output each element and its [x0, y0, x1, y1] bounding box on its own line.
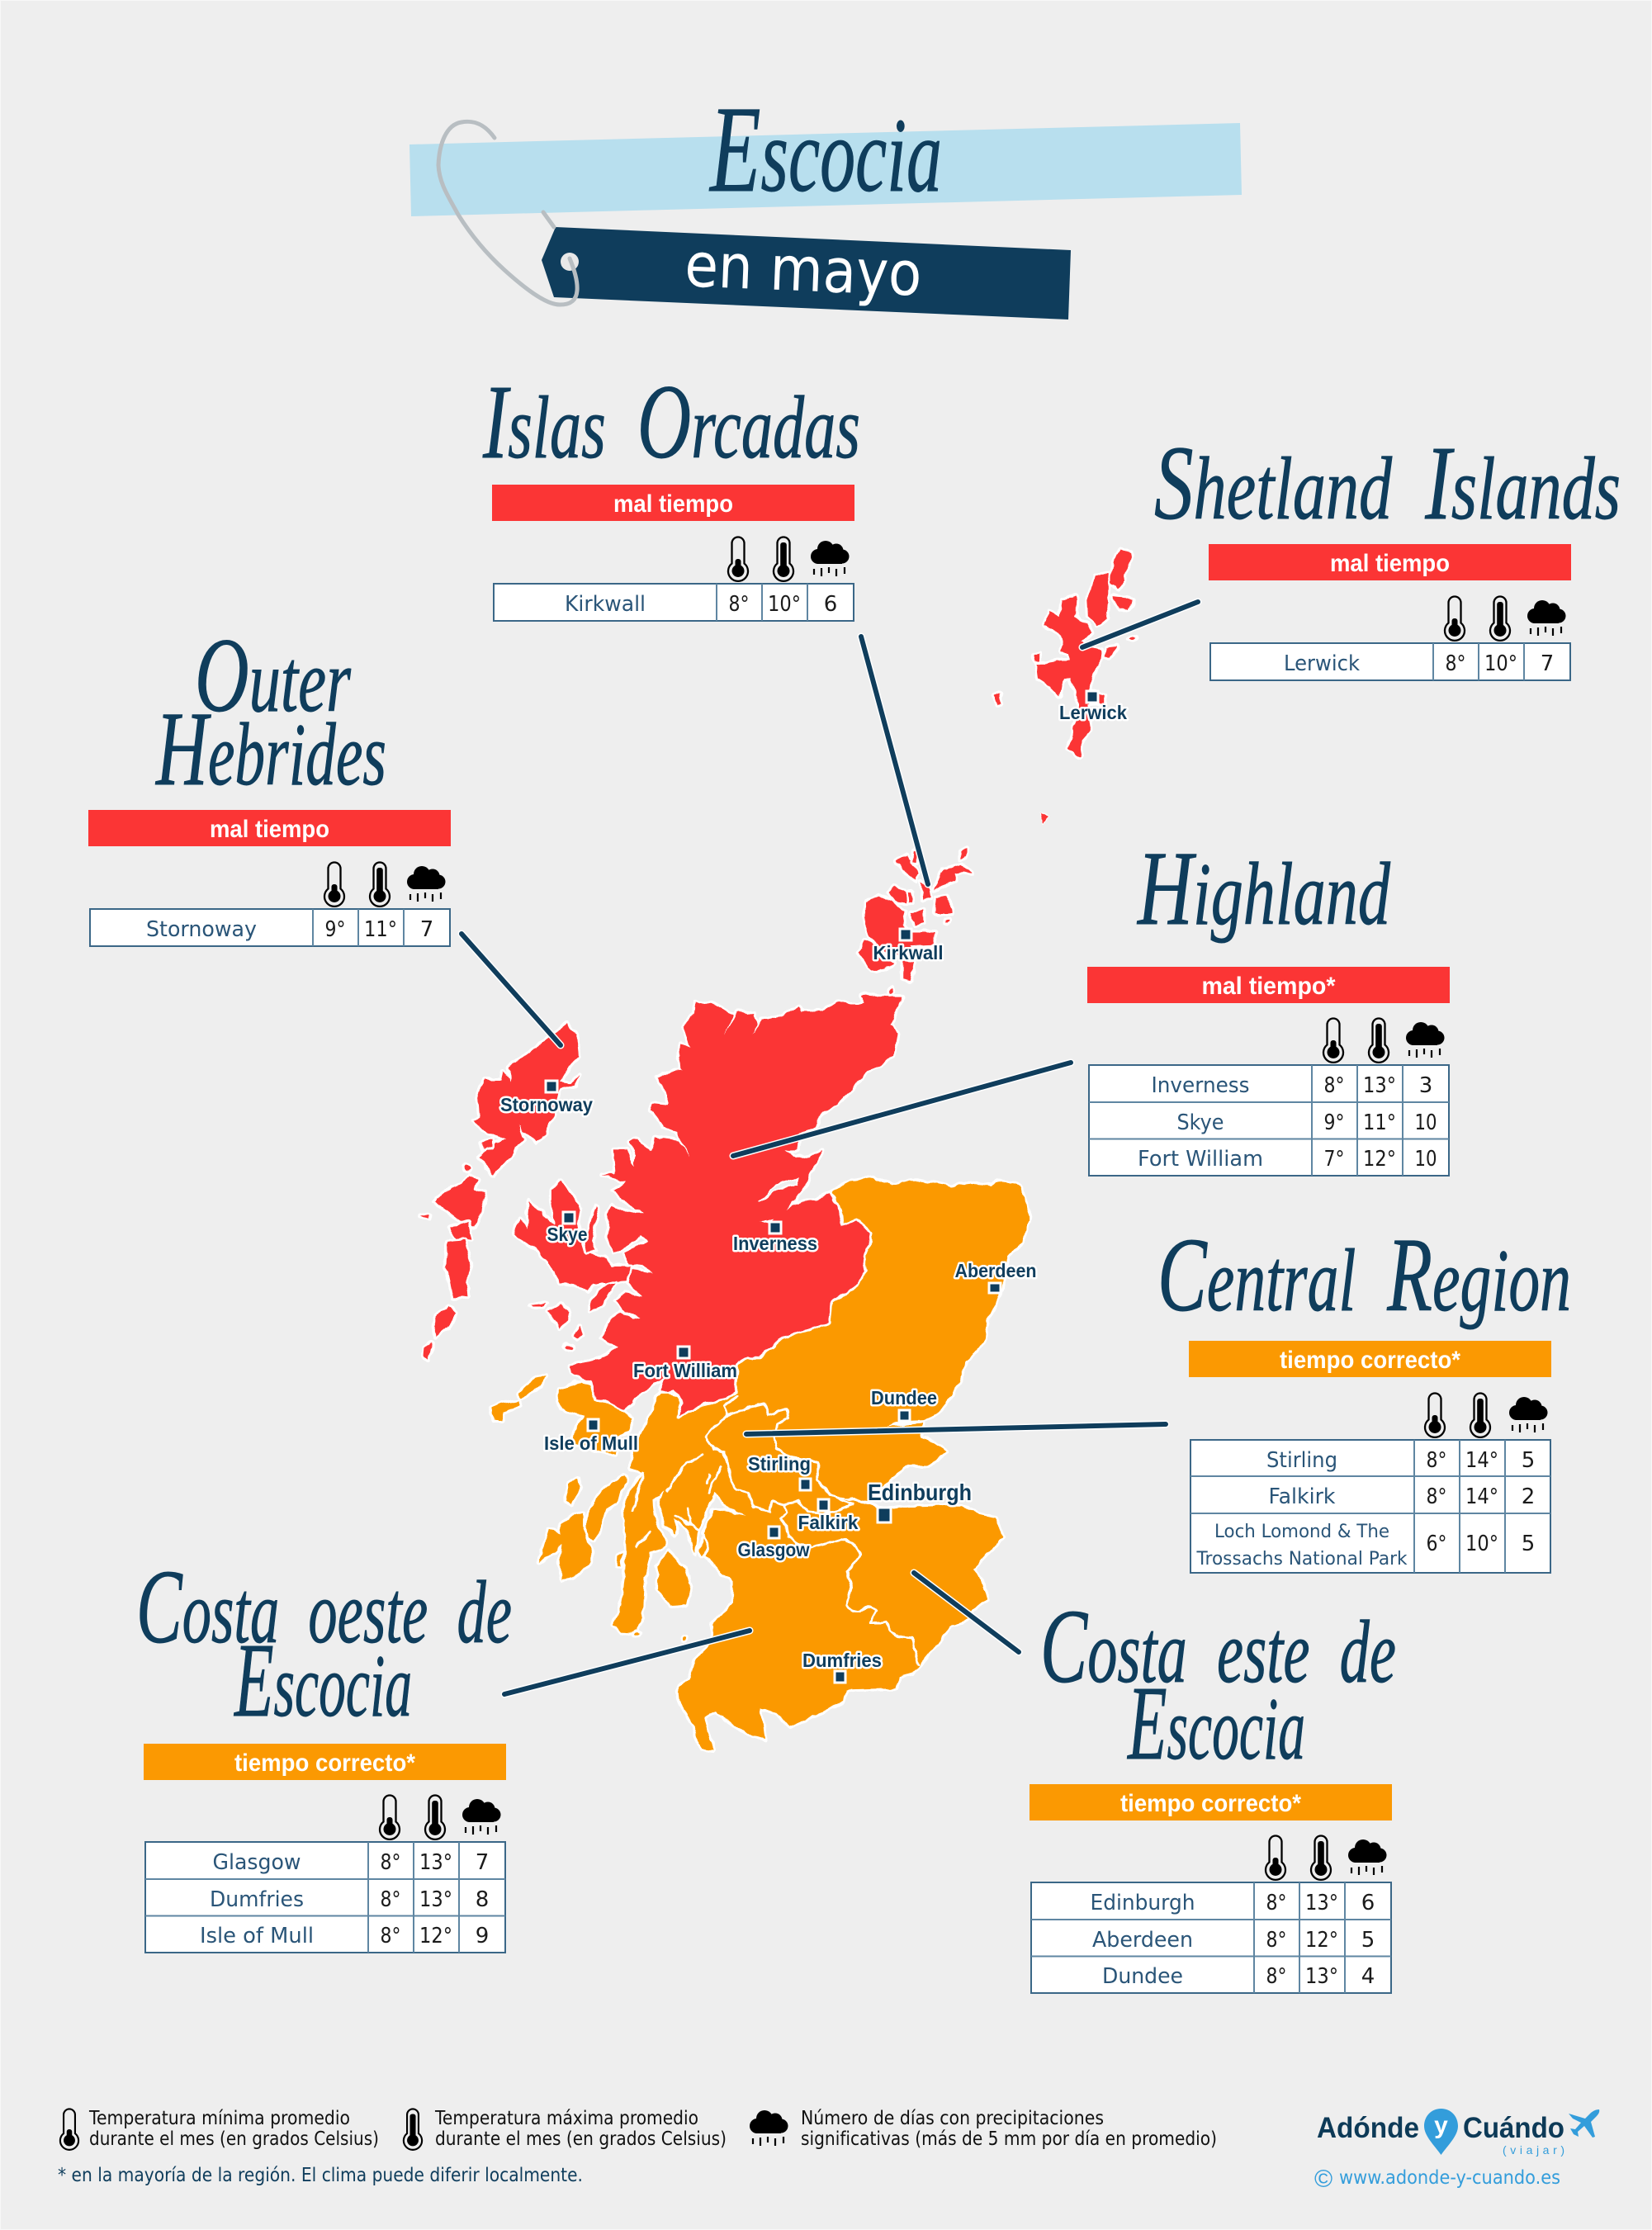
- table: Trossachs National Park: [1196, 1549, 1408, 1570]
- islet: Monach: [420, 1214, 429, 1219]
- logo: [1314, 2109, 1599, 2193]
- leader: West coast: [504, 1631, 750, 1694]
- icon: plane: [1569, 2109, 1599, 2138]
- table: 9: [476, 1924, 489, 1948]
- Shetland: Yell: [1087, 575, 1109, 626]
- city: Inverness: Inverness: [733, 1233, 817, 1254]
- Orkney: North Ronaldsay: [960, 848, 968, 859]
- table: 2: [1522, 1484, 1535, 1509]
- icons: [1425, 1394, 1547, 1437]
- legend item: rainy days: significativas (más de 5 mm por día en promedio): [801, 2128, 1217, 2150]
- island: Bute: [700, 1539, 708, 1555]
- city: Glasgow: [738, 1527, 810, 1560]
- table: 10: [1415, 1147, 1437, 1172]
- heading: Islas Orcadas: [482, 363, 860, 481]
- table: Skye: [1177, 1110, 1224, 1135]
- status bar: [492, 485, 854, 521]
- table: 11°: [364, 917, 397, 942]
- status bar: [1209, 544, 1571, 580]
- website: [1314, 2166, 1560, 2193]
- status bar: [1087, 967, 1450, 1003]
- legend item: minimum temperature: Temperatura mínima promedio: [88, 2108, 350, 2129]
- legend item: maximum temperature: durante el mes (en grados Celsius): [435, 2128, 727, 2150]
- island: Barra: [433, 1307, 457, 1336]
- table: 10: [1415, 1110, 1437, 1135]
- heading line 1: Costa este de: [1040, 1588, 1396, 1705]
- panel: Outer Hebrides: [88, 617, 451, 946]
- Shetland Mainland: [1036, 596, 1105, 757]
- table: 13°: [1363, 1073, 1396, 1098]
- table: Fort William: [1138, 1147, 1263, 1172]
- map of Scotland: [420, 549, 1135, 1750]
- city: Aberdeen: Aberdeen: [954, 1260, 1037, 1281]
- table: [90, 909, 450, 946]
- table: 9°: [1324, 1110, 1344, 1135]
- city: Isle of Mull: [544, 1419, 638, 1454]
- weather panel body: [1087, 967, 1450, 1176]
- table: 7: [1541, 651, 1554, 676]
- table: 5: [1361, 1928, 1375, 1953]
- table: 6: [1361, 1891, 1375, 1915]
- island: Coll: [519, 1374, 547, 1398]
- Orkney: Mainland: [866, 896, 935, 954]
- city: Dumfries: [802, 1650, 882, 1683]
- island: Colonsay: [566, 1479, 580, 1503]
- city: Edinburgh: Edinburgh: [868, 1480, 972, 1505]
- status bar: tiempo correcto*: [1120, 1790, 1301, 1817]
- city: Fort William: [633, 1347, 737, 1381]
- Shetland: Papa Stour: [1033, 655, 1040, 661]
- Shetland: Out Skerries: [1130, 637, 1135, 641]
- weather panel body: [492, 485, 854, 621]
- map: orange southern regions: [492, 1177, 1030, 1750]
- status bar: mal tiempo: [613, 490, 733, 518]
- table: 9°: [325, 917, 345, 942]
- Stroma: [888, 988, 892, 995]
- table: 8°: [1324, 1073, 1344, 1098]
- city: Kirkwall: Kirkwall: [873, 942, 943, 963]
- panel: Highland: [1087, 830, 1450, 1176]
- city: Skye: Skye: [547, 1224, 588, 1245]
- status bar: mal tiempo: [210, 816, 329, 843]
- table: 8°: [1266, 1964, 1286, 1989]
- city: Stirling: Stirling: [748, 1453, 811, 1475]
- Orkney: Shapinsay: [911, 910, 925, 926]
- icons: [380, 1795, 500, 1839]
- legend item: minimum temperature: [60, 2108, 379, 2150]
- status bar: [144, 1744, 506, 1780]
- table: 8°: [1266, 1928, 1286, 1953]
- table: 5: [1522, 1532, 1535, 1556]
- table: 8°: [380, 1924, 401, 1948]
- tag hole: [561, 253, 579, 271]
- islet: Sanda: [634, 1632, 640, 1635]
- table: 6°: [1427, 1532, 1446, 1556]
- table: 14°: [1465, 1484, 1498, 1509]
- table: Lerwick: [1284, 651, 1360, 676]
- city: Falkirk: Falkirk: [798, 1512, 859, 1533]
- city: Skye: [547, 1212, 588, 1245]
- brand word: Adónde: Adónde: [1317, 2112, 1419, 2144]
- island: Lewis and Harris: [474, 1023, 580, 1176]
- islet: Berneray: [463, 1166, 471, 1171]
- city markers and labels: [500, 691, 1127, 1683]
- leader: Central: [746, 1424, 1166, 1434]
- status bar: tiempo correcto*: [1280, 1347, 1460, 1374]
- panel: Central Region: [1157, 1216, 1571, 1573]
- city: Glasgow: Glasgow: [738, 1539, 810, 1560]
- tagline: ( v i a j a r ): [1503, 2143, 1564, 2157]
- icon: map pin with y: [1424, 2109, 1458, 2155]
- table: 8°: [728, 592, 750, 617]
- table: 4: [1361, 1964, 1375, 1989]
- map: Shetland islands: [994, 549, 1135, 757]
- heading: Central Region: [1157, 1216, 1571, 1333]
- leader lines: [462, 602, 1198, 1694]
- city: Fort William: Fort William: [633, 1360, 737, 1381]
- island: Eigg: [573, 1326, 583, 1340]
- legend item: rainy days: Número de días con precipitaciones: [801, 2108, 1104, 2129]
- island: Tiree: [492, 1400, 519, 1421]
- status bar: mal tiempo*: [1202, 973, 1336, 1000]
- icons: [324, 862, 446, 907]
- panel: Costa oeste de Escocia: [136, 1548, 512, 1953]
- island: Islay: [540, 1514, 591, 1579]
- weather panel body: [88, 810, 451, 946]
- table: 8°: [1445, 651, 1466, 676]
- icons: [1266, 1836, 1387, 1880]
- island: Arran: [658, 1552, 691, 1606]
- table: 13°: [419, 1850, 452, 1875]
- table: 8: [476, 1887, 489, 1912]
- Highland mainland: [571, 994, 901, 1415]
- tag string: [438, 121, 577, 305]
- table: 5: [1522, 1448, 1535, 1473]
- status bar: mal tiempo: [1330, 550, 1450, 577]
- island: Skye: [513, 1181, 630, 1292]
- website: ©: [1314, 2166, 1332, 2193]
- map: red northern regions: [420, 848, 971, 1415]
- table: 12°: [1305, 1928, 1338, 1953]
- heading line 2: Hebrides: [155, 690, 386, 807]
- table: 7°: [1324, 1147, 1344, 1172]
- Orkney: Eday: [921, 883, 930, 899]
- island: Raasay: [586, 1205, 597, 1253]
- panel: Shetland Islands: [1154, 424, 1621, 680]
- city: Inverness: [733, 1222, 817, 1254]
- island: North Uist: [435, 1176, 485, 1228]
- table: 13°: [419, 1887, 452, 1912]
- Shetland: Unst: [1110, 549, 1131, 589]
- weather panel body: [1209, 544, 1571, 680]
- leader: Highland: [733, 1063, 1071, 1156]
- region boundaries and inlets: [634, 1396, 917, 1664]
- Orkney: Egilsay: [908, 892, 913, 902]
- city: Dundee: Dundee: [871, 1387, 937, 1409]
- weather panel body: [1030, 1784, 1392, 1993]
- brand word: Cuándo: Cuándo: [1463, 2112, 1564, 2144]
- city: Edinburgh: [868, 1480, 972, 1522]
- table: Stornoway: [146, 917, 257, 942]
- city: Stornoway: Stornoway: [500, 1094, 593, 1115]
- table: [1210, 643, 1570, 680]
- website: www.adonde-y-cuando.es: [1339, 2167, 1560, 2189]
- table: [494, 584, 854, 621]
- table: [1031, 1882, 1391, 1993]
- city: Stornoway: [500, 1081, 593, 1115]
- table: Dumfries: [210, 1887, 304, 1912]
- weather panel body: [1189, 1341, 1551, 1573]
- table: 7: [420, 917, 433, 942]
- Orkney: Auskerry: [945, 919, 949, 922]
- table: 12°: [1363, 1147, 1396, 1172]
- city: Dundee: [871, 1387, 937, 1421]
- city: Falkirk: [798, 1499, 859, 1533]
- table: 8°: [380, 1850, 401, 1875]
- city: Lerwick: [1059, 691, 1127, 723]
- legend item: maximum temperature: Temperatura máxima promedio: [434, 2108, 698, 2129]
- heading line 2: Escocia: [1127, 1664, 1305, 1782]
- Orkney: South Ronaldsay: [903, 960, 915, 980]
- Orkney: Rousay: [890, 887, 908, 903]
- title banner: [409, 81, 1242, 320]
- islets near Harris: [482, 1139, 492, 1149]
- island: Benbecula: [450, 1222, 471, 1240]
- title ribbon: light blue band: [409, 123, 1242, 216]
- table: Kirkwall: [565, 592, 646, 617]
- island: Muck: [565, 1345, 572, 1348]
- panel: Costa este de Escocia: [1030, 1588, 1396, 1993]
- table: 3: [1419, 1073, 1432, 1098]
- table: 10°: [1484, 651, 1517, 676]
- table: 10°: [768, 592, 801, 617]
- table: [1190, 1440, 1550, 1573]
- island: Rum: [547, 1304, 570, 1327]
- leader: Shetland: [1082, 602, 1198, 647]
- Orkney: Hoy: [859, 940, 894, 971]
- heading line 1: Outer: [195, 617, 352, 734]
- status bar: tiempo correcto*: [234, 1749, 415, 1777]
- table: 7: [476, 1850, 489, 1875]
- table: Inverness: [1151, 1073, 1250, 1098]
- table: Stirling: [1266, 1448, 1337, 1473]
- table: 13°: [1305, 1891, 1338, 1915]
- table: Dundee: [1102, 1964, 1183, 1989]
- city: Aberdeen: [954, 1260, 1037, 1293]
- table: 8°: [1427, 1484, 1446, 1509]
- icons: [1323, 1019, 1445, 1063]
- icons: [1445, 596, 1565, 641]
- table: 10°: [1465, 1532, 1498, 1556]
- table: [1089, 1065, 1449, 1176]
- status bar: [88, 810, 451, 846]
- legend item: maximum temperature: [404, 2108, 727, 2150]
- city: Kirkwall: [873, 929, 943, 963]
- leader: East coast: [914, 1573, 1019, 1652]
- panel: Islas Orcadas: [482, 363, 860, 621]
- table: Aberdeen: [1092, 1928, 1193, 1953]
- city: Isle of Mull: Isle of Mull: [544, 1432, 638, 1454]
- leader: Outer Hebrides: [462, 934, 561, 1045]
- Shetland: Foula: [994, 694, 1001, 704]
- island: South Uist: [446, 1240, 470, 1297]
- Fair Isle islet: [1041, 813, 1048, 825]
- Cromarty firth: [760, 1177, 798, 1202]
- Shetland: Fetlar: [1114, 596, 1133, 609]
- islet: Vatersay: [423, 1342, 433, 1358]
- footnote: * en la mayoría de la región. El clima puede diferir localmente.: [58, 2165, 583, 2186]
- mainland central and south: [613, 1177, 1030, 1750]
- heading line 2: Escocia: [234, 1622, 412, 1739]
- legend item: minimum temperature: durante el mes (en grados Celsius): [89, 2128, 379, 2150]
- heading: Highland: [1137, 830, 1391, 947]
- island: Canna: [531, 1303, 546, 1307]
- table: 11°: [1363, 1110, 1396, 1135]
- table: 13°: [1305, 1964, 1338, 1989]
- legend: [58, 2108, 1217, 2186]
- icon: map pin with y: y: [1434, 2112, 1448, 2139]
- Orkney: Westray: [896, 855, 918, 881]
- table: 8°: [1266, 1891, 1286, 1915]
- table: Loch Lomond & The: [1214, 1522, 1389, 1542]
- island: Isle of Mull: [558, 1381, 632, 1454]
- table: 8°: [1427, 1448, 1446, 1473]
- icons: [728, 537, 849, 581]
- Orkney: Stronsay: [935, 896, 952, 914]
- table: Edinburgh: [1090, 1891, 1195, 1915]
- table: Falkirk: [1268, 1484, 1336, 1509]
- table: 6: [824, 592, 837, 617]
- island: Jura: [586, 1475, 627, 1541]
- Orkney: Sanday: [935, 864, 971, 890]
- Shetland: Whalsay: [1103, 646, 1118, 658]
- table: 12°: [419, 1924, 452, 1948]
- Orkney: Papa Westray: [912, 850, 916, 863]
- heading line 1: Costa oeste de: [136, 1548, 512, 1665]
- weather panel body: [144, 1744, 506, 1953]
- luggage tag: navy: [542, 227, 1071, 320]
- legend item: rainy days: [750, 2108, 1217, 2150]
- Sleat: [589, 1283, 616, 1312]
- leader: Orkney: [861, 637, 928, 884]
- islet: Ailsa Craig: [683, 1636, 687, 1641]
- title text: Escocia: [709, 81, 942, 218]
- subtitle text: en mayo: [684, 230, 923, 310]
- table: [145, 1842, 505, 1953]
- status bar: [1189, 1341, 1551, 1377]
- island: Gigha: [617, 1552, 622, 1567]
- table: Glasgow: [213, 1850, 301, 1875]
- city: Stirling: [748, 1453, 811, 1490]
- table: 8°: [380, 1887, 401, 1912]
- city: Lerwick: Lerwick: [1059, 702, 1127, 723]
- table: Isle of Mull: [200, 1924, 314, 1948]
- city: Dumfries: Dumfries: [802, 1650, 882, 1671]
- status bar: [1030, 1784, 1392, 1820]
- table: 14°: [1465, 1448, 1498, 1473]
